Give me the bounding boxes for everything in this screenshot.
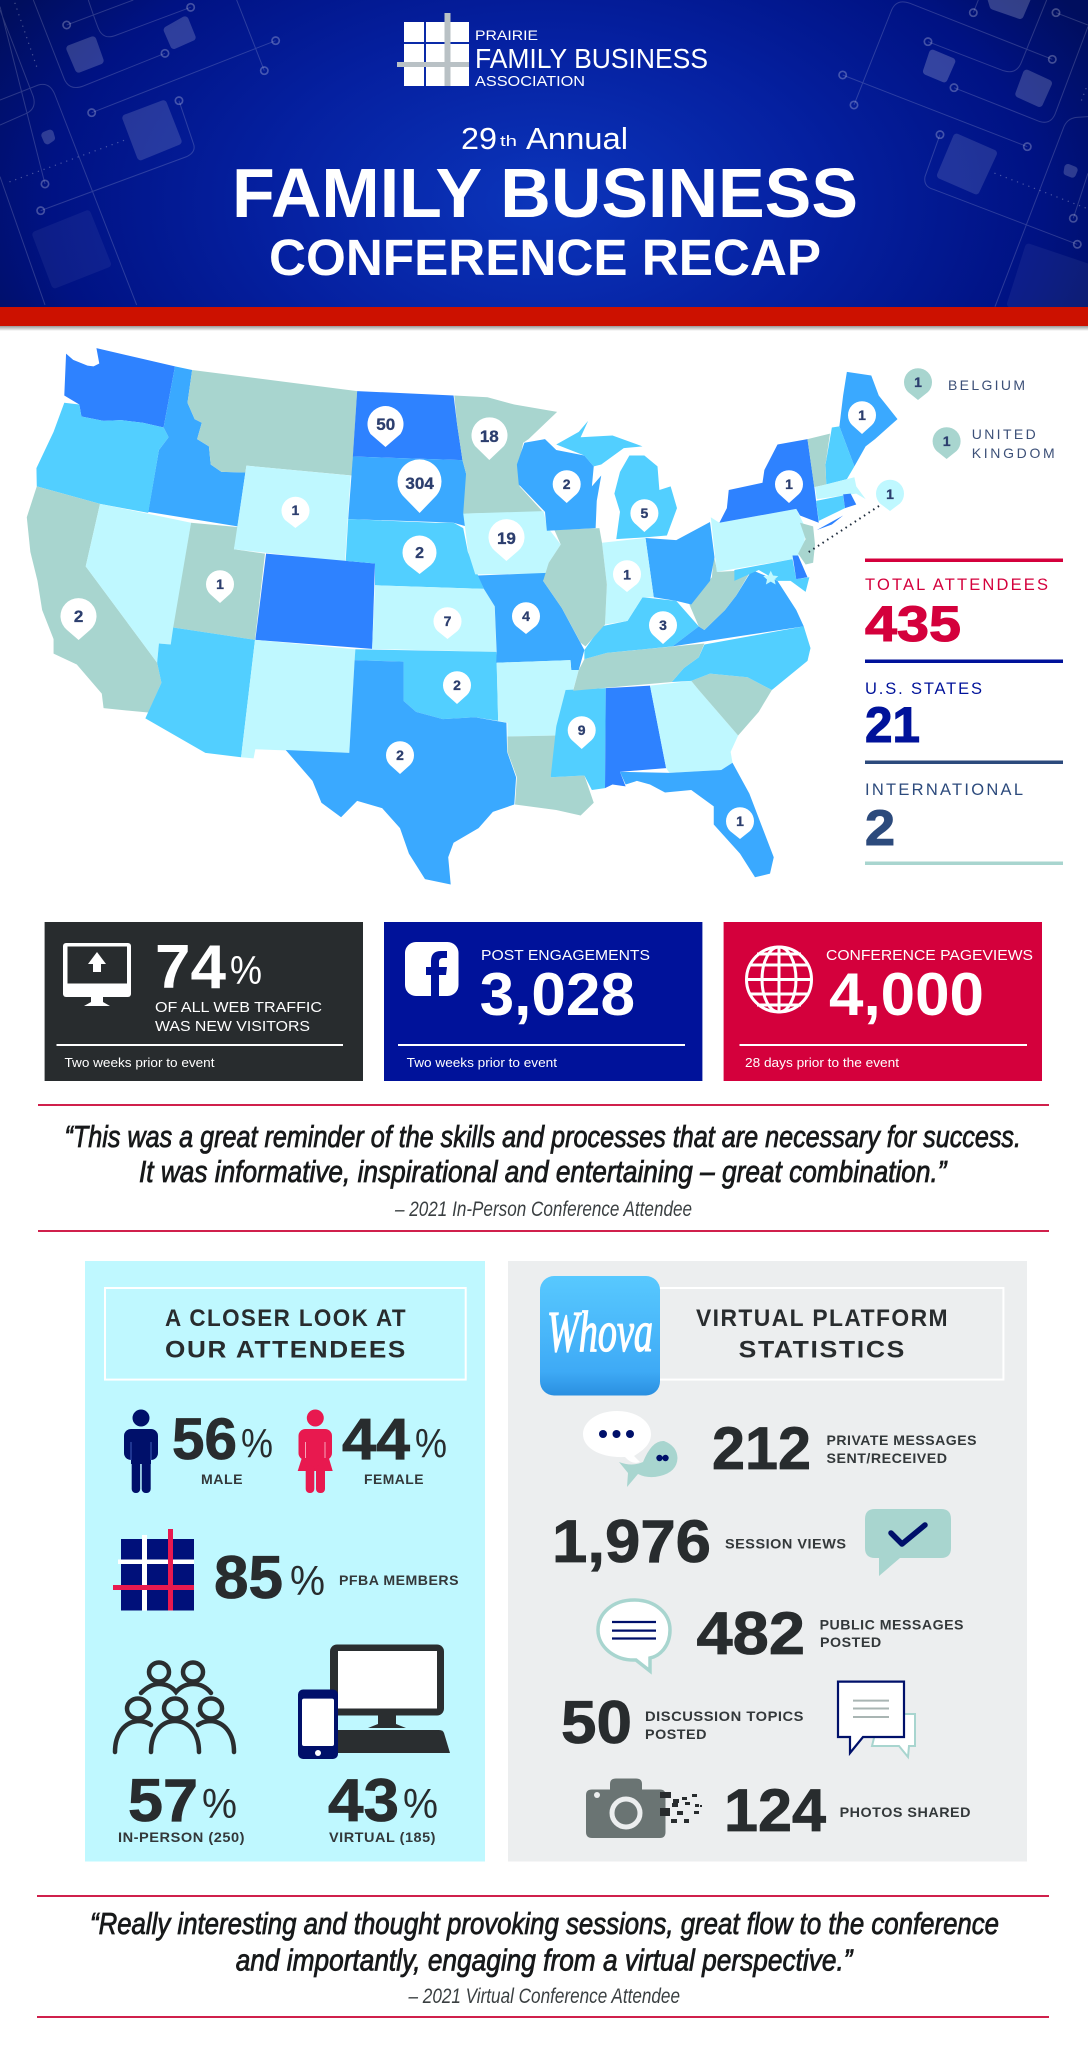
stat: virtual — [328, 1767, 438, 1845]
pin: Iowa 19: 19 — [497, 529, 516, 548]
stat: discussion topics: POSTED — [645, 1726, 707, 1742]
timeframe note: 28 days prior to the event — [745, 1056, 900, 1070]
pin: New York 1: 1 — [785, 476, 793, 492]
panel: virtual platform statistics — [508, 1261, 1027, 1862]
stat: session views — [552, 1508, 846, 1575]
pin: South Dakota 304: 304 — [405, 474, 434, 493]
heading — [105, 1288, 466, 1380]
stat: private messages: SENT/RECEIVED — [826, 1450, 948, 1466]
pin: Wyoming 1: 1 — [292, 502, 300, 518]
pin: Mississippi 9 — [568, 716, 596, 749]
pin: California 2: 2 — [74, 607, 83, 626]
stat: private messages: 212 — [712, 1415, 811, 1482]
timeframe note: Two weeks prior to event — [64, 1056, 215, 1070]
icon: female — [298, 1410, 333, 1493]
stat: post engagements: 3,028 — [480, 961, 635, 1028]
icon: desktop and tablet — [298, 1644, 450, 1759]
pin: Oklahoma 2 — [443, 671, 471, 704]
panel: closer look at attendees — [85, 1261, 485, 1862]
stat: female: 44 — [342, 1407, 410, 1472]
pin: Indiana 1 — [613, 560, 641, 592]
attendance totals — [865, 558, 1063, 865]
stat: photos shared — [724, 1777, 971, 1844]
title: FAMILY BUSINESS — [232, 154, 858, 232]
heading: A CLOSER LOOK AT — [165, 1305, 407, 1332]
stat: public messages: 482 — [696, 1600, 805, 1667]
stat: total attendees: TOTAL ATTENDEES — [865, 576, 1048, 594]
pin and label: Belgium: BELGIUM — [948, 377, 1025, 393]
stat: female: FEMALE — [364, 1471, 424, 1487]
stat: international: 2 — [865, 800, 895, 856]
stat: U.S. states — [865, 680, 982, 753]
pin: Oklahoma 2: 2 — [453, 677, 461, 693]
stat: in-person: % — [202, 1780, 237, 1827]
pin: Minnesota 18: 18 — [480, 427, 499, 446]
quote: in-person attendee: – 2021 In-Person Conference Attendee — [394, 1198, 692, 1221]
card: web traffic — [45, 922, 363, 1081]
pin: North Dakota 50 — [368, 406, 404, 447]
subtitle: 29th Annual — [461, 121, 628, 156]
stat: PFBA members: PFBA MEMBERS — [339, 1572, 459, 1588]
icon: PFBA grid logo — [113, 1529, 194, 1610]
stat: virtual: % — [403, 1780, 438, 1827]
icon: globe — [746, 947, 812, 1012]
quote: virtual attendee — [37, 1895, 1049, 2018]
quote: in-person attendee: It was informative, inspirational and entertaining – great combination.” — [139, 1154, 948, 1189]
logo: ASSOCIATION — [475, 73, 585, 90]
pin: Florida 1: 1 — [736, 813, 744, 829]
pin: Maine 1 — [848, 401, 876, 434]
icon: discussion bubbles — [838, 1682, 915, 1757]
pin: Kentucky 3: 3 — [659, 617, 667, 633]
stat: conference pageviews — [826, 947, 1033, 1028]
stat: 74 percent: 74 — [155, 933, 227, 1002]
stat: 74 percent: WAS NEW VISITORS — [155, 1018, 310, 1035]
stat: photos shared: 124 — [724, 1777, 827, 1844]
stat: female: % — [415, 1420, 447, 1466]
stat: in-person — [118, 1767, 245, 1845]
logo — [397, 13, 708, 90]
stat: photos shared: PHOTOS SHARED — [840, 1804, 971, 1820]
stat: 74 percent: OF ALL WEB TRAFFIC — [155, 999, 322, 1016]
pin: Missouri 4: 4 — [522, 608, 530, 624]
stat: virtual: VIRTUAL (185) — [329, 1829, 436, 1845]
card: post engagements — [384, 922, 702, 1081]
pin: Wisconsin 2 — [553, 470, 581, 503]
pin and label: United Kingdom: KINGDOM — [972, 445, 1055, 461]
heading: OUR ATTENDEES — [165, 1336, 407, 1364]
heading: VIRTUAL PLATFORM — [696, 1305, 949, 1332]
icon: check bubble — [865, 1509, 951, 1576]
pin: Mississippi 9: 9 — [578, 722, 586, 738]
icon: male — [124, 1410, 158, 1493]
pin and label: United Kingdom — [933, 426, 1055, 461]
pin: Texas 2: 2 — [396, 747, 404, 763]
stat: in-person: IN-PERSON (250) — [118, 1829, 245, 1845]
stat: session views: 1,976 — [552, 1508, 711, 1575]
dotted leader — [808, 506, 879, 552]
stat: PFBA members: % — [290, 1557, 325, 1604]
stat: total attendees: 435 — [865, 596, 961, 652]
pin: Minnesota 18 — [472, 417, 507, 460]
stat: discussion topics — [561, 1689, 804, 1756]
stat: in-person: 57 — [128, 1767, 198, 1834]
pin: Indiana 1: 1 — [623, 566, 631, 582]
icon: in-person group — [115, 1662, 234, 1752]
stat: international: INTERNATIONAL — [865, 781, 1023, 799]
pin: Massachusetts callout 1 — [876, 480, 904, 511]
pin: North Dakota 50: 50 — [376, 415, 395, 434]
stat: U.S. states: 21 — [865, 697, 920, 753]
quote: virtual attendee: – 2021 Virtual Conference Attendee — [408, 1985, 680, 2008]
stat: conference pageviews: 4,000 — [829, 961, 984, 1028]
stat: private messages: PRIVATE MESSAGES — [826, 1432, 977, 1448]
heading: STATISTICS — [739, 1336, 906, 1364]
pin: Nebraska 2: 2 — [415, 545, 424, 562]
pin and label: United Kingdom: UNITED — [972, 426, 1036, 442]
pin: Iowa 19 — [488, 519, 524, 561]
stat: public messages: PUBLIC MESSAGES — [820, 1616, 964, 1632]
pin: Missouri 4 — [512, 602, 540, 634]
US attendance map — [27, 348, 1055, 885]
stat: female — [342, 1407, 447, 1487]
logo: PRAIRIE — [475, 27, 538, 43]
stat: discussion topics: 50 — [561, 1689, 632, 1756]
pin: Michigan 5: 5 — [641, 505, 649, 521]
stat: male: MALE — [201, 1471, 243, 1487]
red band — [0, 307, 1088, 326]
pin: Kentucky 3 — [649, 611, 677, 644]
pin: California 2 — [61, 598, 96, 640]
pin: Wisconsin 2: 2 — [563, 476, 571, 492]
icon: Whova logo — [540, 1276, 660, 1396]
stat: U.S. states: U.S. STATES — [865, 680, 982, 698]
stat: PFBA members — [214, 1544, 459, 1611]
subtitle: 29th Annual: Annual — [526, 121, 628, 156]
card: conference pageviews — [724, 922, 1042, 1081]
icon: monitor with upload arrow — [63, 943, 131, 1006]
icon: private message bubbles — [583, 1411, 678, 1487]
pin: Kansas 7: 7 — [444, 613, 452, 629]
circuit pattern left — [0, 0, 279, 305]
icon: public message bubble — [598, 1600, 670, 1671]
pin: Utah 1 — [206, 570, 234, 603]
stat: public messages — [696, 1600, 964, 1667]
pin: Michigan 5 — [630, 499, 658, 532]
quote: in-person attendee — [38, 1104, 1049, 1232]
quote: virtual attendee: and importantly, engaging from a virtual perspective.” — [236, 1943, 854, 1978]
icon: camera with pixels — [586, 1778, 702, 1838]
stat: virtual: 43 — [328, 1767, 399, 1834]
subtitle: 29th Annual: 29 — [461, 121, 497, 156]
stat: male — [172, 1407, 273, 1487]
stat: conference pageviews: CONFERENCE PAGEVIEWS — [826, 947, 1033, 964]
heading — [600, 1288, 1003, 1380]
pin: Massachusetts callout 1: 1 — [886, 486, 894, 502]
pin: Texas 2 — [386, 741, 414, 774]
stat: male: % — [241, 1420, 273, 1466]
stat: international — [865, 781, 1023, 856]
title — [232, 154, 858, 286]
stat: discussion topics: DISCUSSION TOPICS — [645, 1708, 804, 1724]
stat: private messages — [712, 1415, 977, 1482]
circuit pattern right — [839, 0, 1088, 307]
stat: 74 percent: % — [230, 949, 262, 993]
pin and label: United Kingdom: 1 — [943, 433, 951, 449]
pin: Florida 1 — [726, 807, 754, 839]
pin: New York 1 — [775, 470, 803, 503]
stat: 74 percent — [155, 933, 322, 1035]
eastern states — [463, 372, 898, 877]
pin and label: Belgium — [904, 368, 1025, 400]
stat: session views: SESSION VIEWS — [725, 1536, 846, 1552]
title: CONFERENCE RECAP — [269, 229, 821, 286]
stat: public messages: POSTED — [820, 1634, 882, 1650]
stat: PFBA members: 85 — [214, 1544, 283, 1611]
icon: facebook — [405, 942, 458, 996]
stat: male: 56 — [172, 1407, 237, 1472]
pin and label: Belgium: 1 — [914, 374, 922, 390]
icon: Whova logo: Whova — [547, 1299, 653, 1364]
western states — [27, 348, 557, 885]
stat: total attendees — [865, 576, 1048, 652]
pin: Wyoming 1 — [282, 497, 310, 528]
subtitle: 29th Annual: th — [500, 133, 517, 150]
pin: Nebraska 2 — [402, 535, 436, 574]
timeframe note: Two weeks prior to event — [407, 1056, 558, 1070]
header banner — [0, 0, 1088, 307]
pin: Maine 1: 1 — [858, 407, 866, 423]
pin: South Dakota 304 — [398, 459, 442, 513]
pin: Utah 1: 1 — [216, 576, 224, 592]
pin: Kansas 7 — [434, 607, 462, 639]
stat: post engagements: POST ENGAGEMENTS — [481, 947, 650, 964]
logo: FAMILY BUSINESS — [475, 43, 708, 74]
